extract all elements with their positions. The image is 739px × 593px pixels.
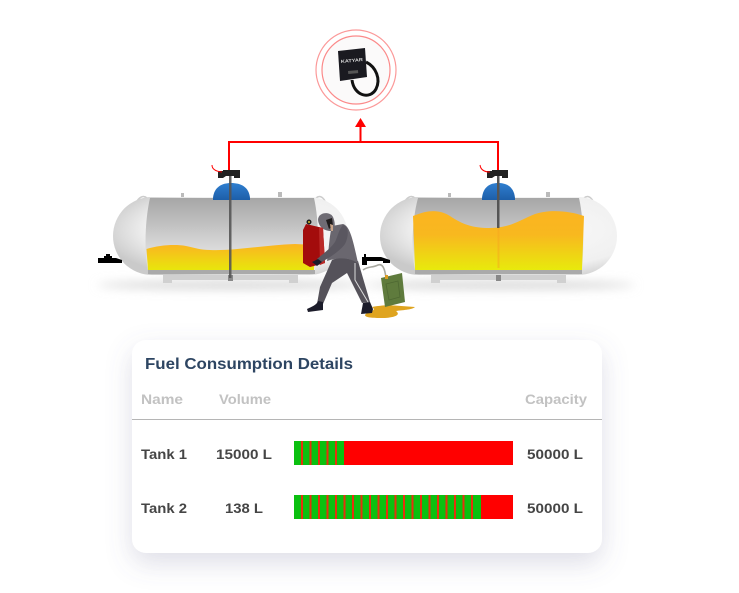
- tank 2 fuel: [413, 211, 584, 270]
- tank 2 rod: [497, 176, 500, 228]
- row: tank 2: 138 L: [225, 500, 263, 516]
- thief mask: [326, 218, 333, 229]
- connection lines and arrow: [229, 118, 498, 170]
- card title: Fuel Consumption Details: [145, 356, 353, 373]
- row: tank 2: Tank 2: [141, 500, 187, 516]
- thief glove: [312, 259, 322, 266]
- bar: tank 2: [294, 495, 513, 519]
- tank 2 window: [413, 198, 583, 270]
- tank 2 sensor head: [487, 170, 508, 178]
- tank 1 legs: [163, 273, 298, 283]
- column headers: Volume: [219, 391, 271, 407]
- row: tank 1: 15000 L: [216, 446, 272, 462]
- row: tank 1: 50000 L: [527, 446, 583, 462]
- thief torso: [327, 224, 358, 263]
- thief skin: [330, 224, 333, 231]
- hose: [363, 265, 386, 278]
- tank 2 legs: [431, 273, 566, 283]
- thief: [303, 213, 373, 314]
- tank 2 dome: [482, 183, 515, 200]
- fuel puddle: [365, 305, 415, 318]
- bar: tank 1: [294, 441, 513, 465]
- jerrycan: [381, 273, 405, 307]
- tank 1 rod: [229, 176, 232, 278]
- table card: [132, 340, 602, 553]
- tank 1 sensor head: [218, 170, 240, 178]
- sensor device: [316, 30, 396, 110]
- row: tank 1: Tank 1: [141, 446, 187, 462]
- thief hood: [318, 213, 335, 231]
- tank 1 dome: [213, 183, 250, 200]
- valves: [98, 254, 390, 265]
- tank 1: [113, 165, 348, 283]
- sensor device: KATYAR: [341, 57, 364, 64]
- tank 1 shell: [113, 197, 348, 275]
- thief shoes: [307, 301, 323, 312]
- ground shadow: [97, 281, 635, 289]
- thief legs: [317, 257, 370, 304]
- column headers: [141, 391, 587, 407]
- row: tank 2: 50000 L: [527, 500, 583, 516]
- column headers: Name: [141, 391, 183, 407]
- tank 2 lifting lugs: [405, 197, 593, 201]
- fuel can carried: [303, 220, 325, 267]
- tank 1 lifting lugs: [137, 197, 325, 201]
- tank 2 shell: [380, 197, 617, 275]
- tank 2: [380, 165, 617, 283]
- tank 1 fuel: [146, 244, 315, 270]
- tank 1 window: [146, 198, 318, 270]
- thief arm: [317, 225, 348, 263]
- row: tank 1: [141, 446, 583, 462]
- column headers: Capacity: [525, 391, 587, 407]
- row: tank 2: [141, 500, 583, 516]
